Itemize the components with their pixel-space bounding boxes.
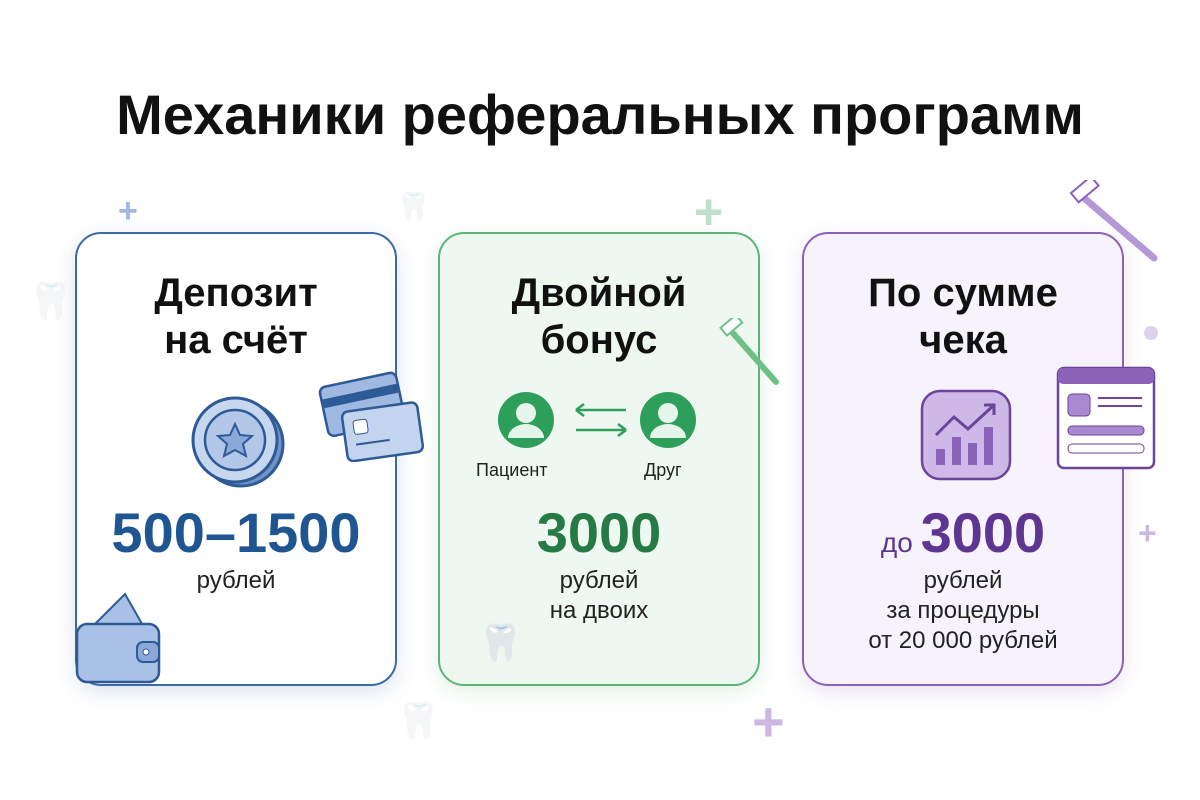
heading — [154, 271, 318, 362]
heading: бонус — [541, 318, 657, 362]
icon: patient — [498, 392, 554, 448]
heading: Двойной — [512, 271, 686, 315]
value: 3000 — [537, 501, 661, 564]
icon: friend — [640, 392, 696, 448]
caption: за процедуры — [886, 597, 1040, 624]
panel: check amount — [802, 232, 1124, 686]
heading: Депозит — [154, 271, 318, 315]
icon: tooth: 🦷 — [478, 622, 523, 663]
panel: deposit — [75, 232, 397, 686]
value: до 3000 — [881, 501, 1045, 564]
heading — [868, 271, 1058, 362]
caption: рублей — [924, 567, 1002, 594]
caption: рублей — [197, 567, 275, 594]
caption — [550, 567, 648, 624]
text: 🦷 — [396, 191, 431, 222]
decor: plus blue: + — [118, 192, 138, 230]
value: 500–1500 — [111, 501, 361, 564]
decor: circle green — [466, 322, 476, 332]
heading — [512, 271, 686, 362]
caption — [868, 567, 1058, 654]
title: Механики реферальных программ — [116, 83, 1084, 146]
heading: По сумме — [868, 271, 1058, 315]
icon: toothbrush green — [719, 318, 779, 385]
icon: wallet — [76, 592, 160, 684]
heading: чека — [919, 318, 1007, 362]
panel: double bonus — [438, 232, 760, 686]
decor: plus purple right: + — [1138, 515, 1157, 551]
arrows — [575, 403, 627, 437]
text: 🦷 — [396, 700, 441, 741]
heading: на счёт — [164, 318, 308, 362]
caption: от 20 000 рублей — [868, 627, 1058, 654]
caption: на двоих — [550, 597, 648, 624]
decor: circle — [1144, 326, 1158, 340]
icon: coin — [192, 396, 284, 488]
labels: Пациент — [476, 460, 548, 480]
decor: plus purple bottom: + — [752, 690, 785, 753]
icon: toothbrush purple — [1070, 180, 1158, 262]
decor: teeth: 🦷 — [28, 280, 73, 321]
panel: double bonus: Друг — [644, 460, 682, 480]
icon: browser window — [1056, 366, 1156, 470]
icon: cards — [318, 372, 424, 462]
icon: chart — [920, 390, 1012, 480]
decor: plus green: + — [694, 184, 723, 240]
caption: рублей — [560, 567, 638, 594]
